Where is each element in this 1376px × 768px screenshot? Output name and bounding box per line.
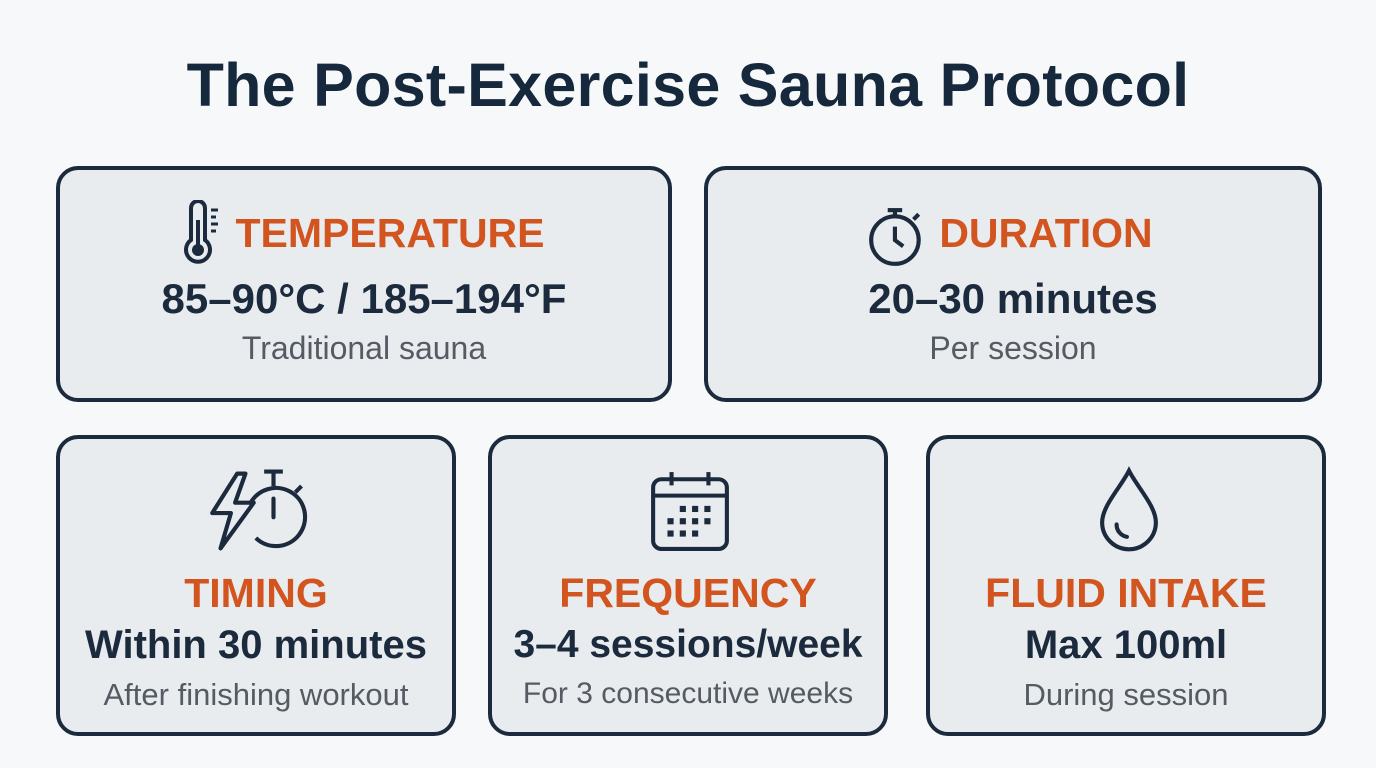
panel: timing bbox=[56, 435, 456, 736]
value: 3–4 sessions/week bbox=[513, 623, 863, 666]
heading: FLUID INTAKE bbox=[985, 570, 1267, 616]
value: 20–30 minutes bbox=[868, 275, 1158, 322]
panel: fluid intake bbox=[926, 435, 1326, 736]
subtitle: For 3 consecutive weeks bbox=[523, 677, 853, 710]
subtitle: After finishing workout bbox=[104, 677, 408, 712]
heading: TIMING bbox=[184, 570, 328, 616]
icon: lightning stopwatch bbox=[210, 470, 308, 550]
subtitle: Traditional sauna bbox=[242, 330, 486, 366]
heading: DURATION bbox=[939, 210, 1153, 256]
title: The Post-Exercise Sauna Protocol bbox=[187, 51, 1189, 119]
icon: calendar bbox=[651, 472, 729, 551]
value: Within 30 minutes bbox=[85, 623, 427, 667]
value: Max 100ml bbox=[1025, 623, 1227, 667]
icon: water drop bbox=[1100, 466, 1158, 552]
icon: thermometer bbox=[184, 200, 218, 264]
panel: duration bbox=[704, 166, 1322, 402]
value: 85–90°C / 185–194°F bbox=[162, 275, 566, 322]
subtitle: Per session bbox=[929, 330, 1097, 366]
subtitle: During session bbox=[1023, 677, 1229, 712]
panel: frequency bbox=[488, 435, 888, 736]
heading: FREQUENCY bbox=[559, 570, 817, 616]
icon: stopwatch bbox=[869, 208, 921, 266]
heading: TEMPERATURE bbox=[235, 210, 545, 256]
panel: temperature bbox=[56, 166, 672, 402]
